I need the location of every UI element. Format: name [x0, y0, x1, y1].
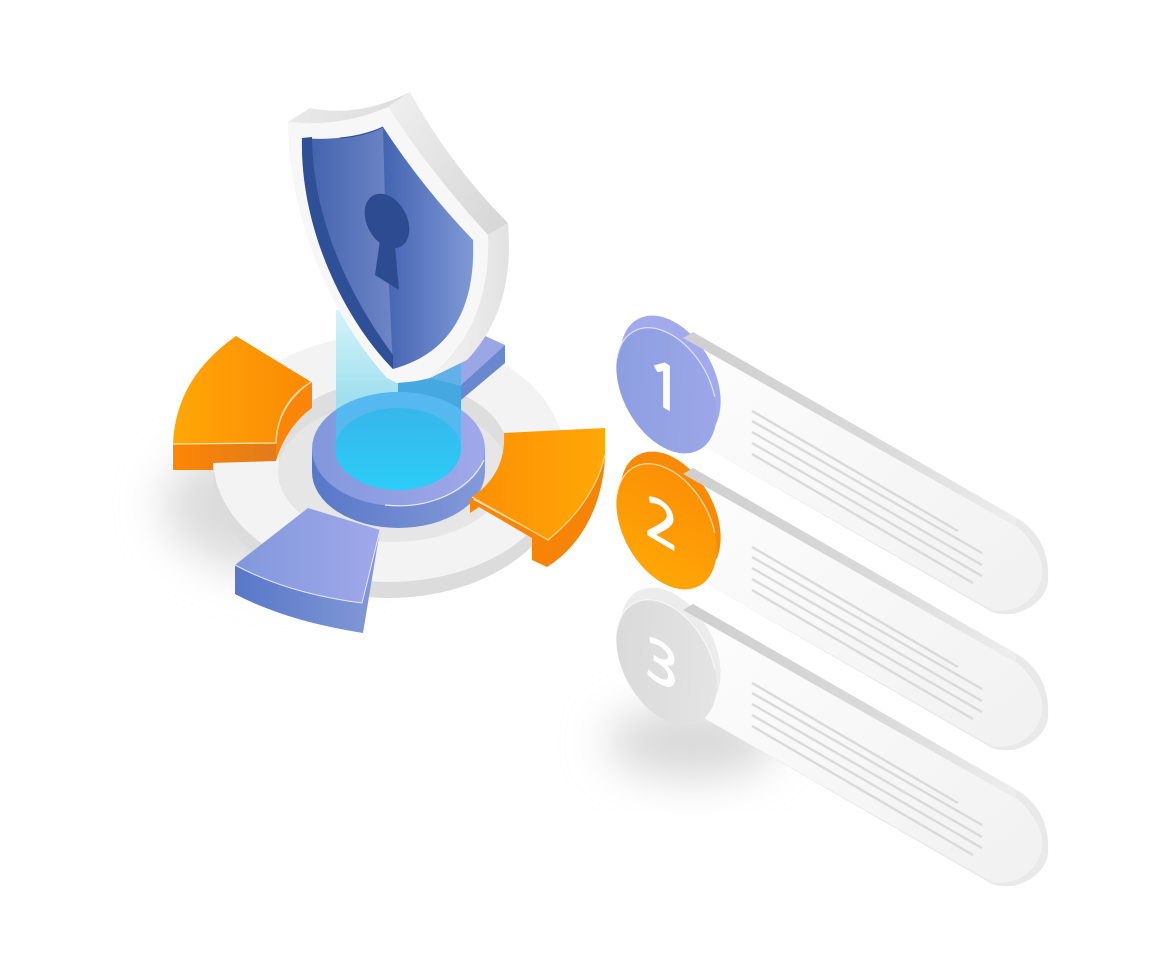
orange segment right	[470, 428, 605, 567]
base platform	[213, 334, 565, 598]
shield blue left panel	[302, 127, 393, 369]
shadow under card 3	[607, 706, 777, 778]
card 3 text lines	[752, 683, 982, 855]
card 3	[596, 570, 1048, 886]
shield dark rim	[302, 137, 393, 369]
card 1	[596, 298, 1048, 614]
back purple segment	[440, 335, 505, 400]
card 2 body	[690, 469, 1048, 750]
orange segment left	[173, 336, 312, 470]
purple segment bottom	[235, 508, 380, 633]
card 2 strip	[683, 468, 1017, 662]
keyhole	[356, 186, 418, 290]
shield white face	[288, 107, 488, 383]
card 3 number badge: 3	[644, 627, 680, 704]
shield blue right panel	[380, 127, 473, 369]
center cylinder	[312, 392, 485, 528]
shield back edge top	[288, 92, 410, 123]
card 1 body	[690, 333, 1048, 614]
card 3 number badge	[596, 570, 741, 743]
shield	[288, 92, 509, 383]
card 3 body	[690, 605, 1048, 886]
light beam	[336, 310, 461, 450]
card 2 text lines	[752, 547, 982, 719]
card 1 strip	[683, 332, 1017, 526]
shadow under base	[163, 433, 433, 577]
shield back edge diagonal	[388, 92, 508, 235]
card 2	[596, 434, 1048, 750]
card 1 text lines	[752, 411, 982, 583]
card 1 number badge	[596, 298, 741, 471]
illustration	[152, 92, 1048, 886]
card 2 number badge	[596, 434, 741, 607]
card 2 number badge: 2	[644, 486, 680, 563]
shield back edge side	[430, 223, 509, 378]
card 1 number badge: 1	[646, 347, 684, 429]
card 3 strip	[683, 604, 1017, 798]
